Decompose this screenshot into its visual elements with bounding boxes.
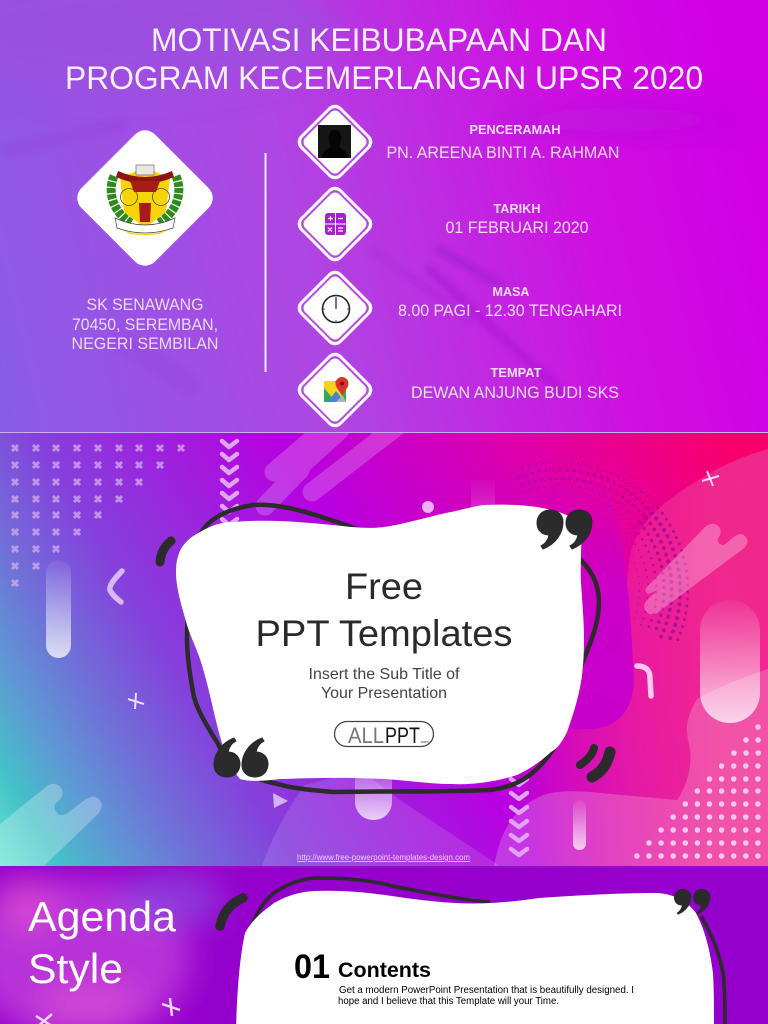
school address: 70450, SEREMBAN,: [72, 315, 218, 334]
time text: [398, 287, 620, 316]
slide 1 background: [0, 0, 768, 432]
time text: MASA: [492, 284, 530, 299]
icon: speaker portrait: [298, 104, 372, 180]
title: PROGRAM KECEMERLANGAN UPSR 2020: [65, 60, 703, 96]
cover title: Free: [345, 566, 423, 607]
agenda item 01: Get a modern PowerPoint Presentation that is beautifully designed. I: [339, 985, 634, 996]
decoration: translucent pills: [46, 480, 760, 850]
school address: SK SENAWANG: [86, 295, 204, 314]
slide 1: event details panel: [0, 0, 768, 432]
decoration: diagonal bars: [0, 424, 748, 866]
title: [68, 28, 702, 90]
decoration: halftone arc: [516, 462, 688, 644]
agenda item 01: 01: [294, 948, 330, 986]
heading: Agenda Style: Agenda: [28, 893, 177, 940]
cover subtitle: Insert the Sub Title of: [308, 666, 460, 683]
vertical divider: [264, 153, 266, 372]
venue text: [412, 368, 618, 398]
speaker text: PENCERAMAH: [470, 122, 560, 137]
icon: map pin: [298, 352, 372, 428]
agenda item 01: Contents: [338, 959, 431, 982]
slide 3 background: [0, 868, 768, 1024]
outline ring: [250, 878, 725, 1024]
decoration: chevrons: [222, 441, 527, 855]
heading: Agenda Style: Style: [28, 945, 123, 992]
school logo diamond: [77, 130, 213, 266]
dot triangle: [637, 727, 759, 856]
quote mark: opening: [214, 738, 268, 777]
icon: calculator: [298, 186, 372, 262]
heading: Agenda Style: [28, 893, 177, 992]
venue text: TEMPAT: [490, 365, 542, 380]
white blob card: [236, 891, 714, 1024]
icon: clock: [298, 270, 372, 346]
cover subtitle: Your Presentation: [321, 685, 447, 702]
accent strokes: [160, 541, 610, 777]
ALLPPT logo: .com: [420, 739, 429, 744]
slide 3: agenda panel: [0, 868, 768, 1024]
decoration: crosses: [36, 998, 180, 1024]
slide 2: template cover panel: [0, 424, 768, 866]
title: MOTIVASI KEIBUBAPAAN DAN: [151, 22, 607, 58]
ALLPPT logo: PPT: [385, 723, 420, 748]
school address: [72, 298, 218, 349]
decoration: small accents: [110, 471, 719, 808]
school address: NEGERI SEMBILAN: [72, 334, 218, 353]
agenda item 01: hope and I believe that this Template will your Time.: [338, 996, 559, 1007]
icon: school crest: [111, 165, 179, 235]
date text: TARIKH: [494, 201, 540, 216]
accent comma: [220, 898, 243, 926]
agenda item 01: [294, 948, 634, 1007]
date text: [446, 204, 588, 233]
slide separators: [0, 431, 768, 869]
outline ring: [187, 505, 599, 792]
date text: 01 FEBRUARI 2020: [446, 218, 588, 237]
website link: http://www.free-powerpoint-templates-design.com: [297, 853, 470, 862]
ALLPPT logo: [334, 722, 434, 748]
venue text: DEWAN ANJUNG BUDI SKS: [411, 383, 619, 402]
speaker text: PN. AREENA BINTI A. RAHMAN: [386, 143, 620, 162]
quote mark: closing: [537, 510, 592, 549]
cover subtitle: [310, 668, 460, 698]
time text: 8.00 PAGI - 12.30 TENGAHARI: [398, 301, 622, 320]
white blob card: [176, 505, 584, 784]
cover title: [258, 574, 512, 654]
decoration: cross grid: [12, 445, 184, 586]
ALLPPT logo: ALL: [348, 723, 384, 748]
cover title: PPT Templates: [256, 613, 512, 654]
quote mark: closing: [674, 889, 710, 915]
speaker text: [388, 125, 618, 158]
slide 2 background: [0, 433, 768, 866]
